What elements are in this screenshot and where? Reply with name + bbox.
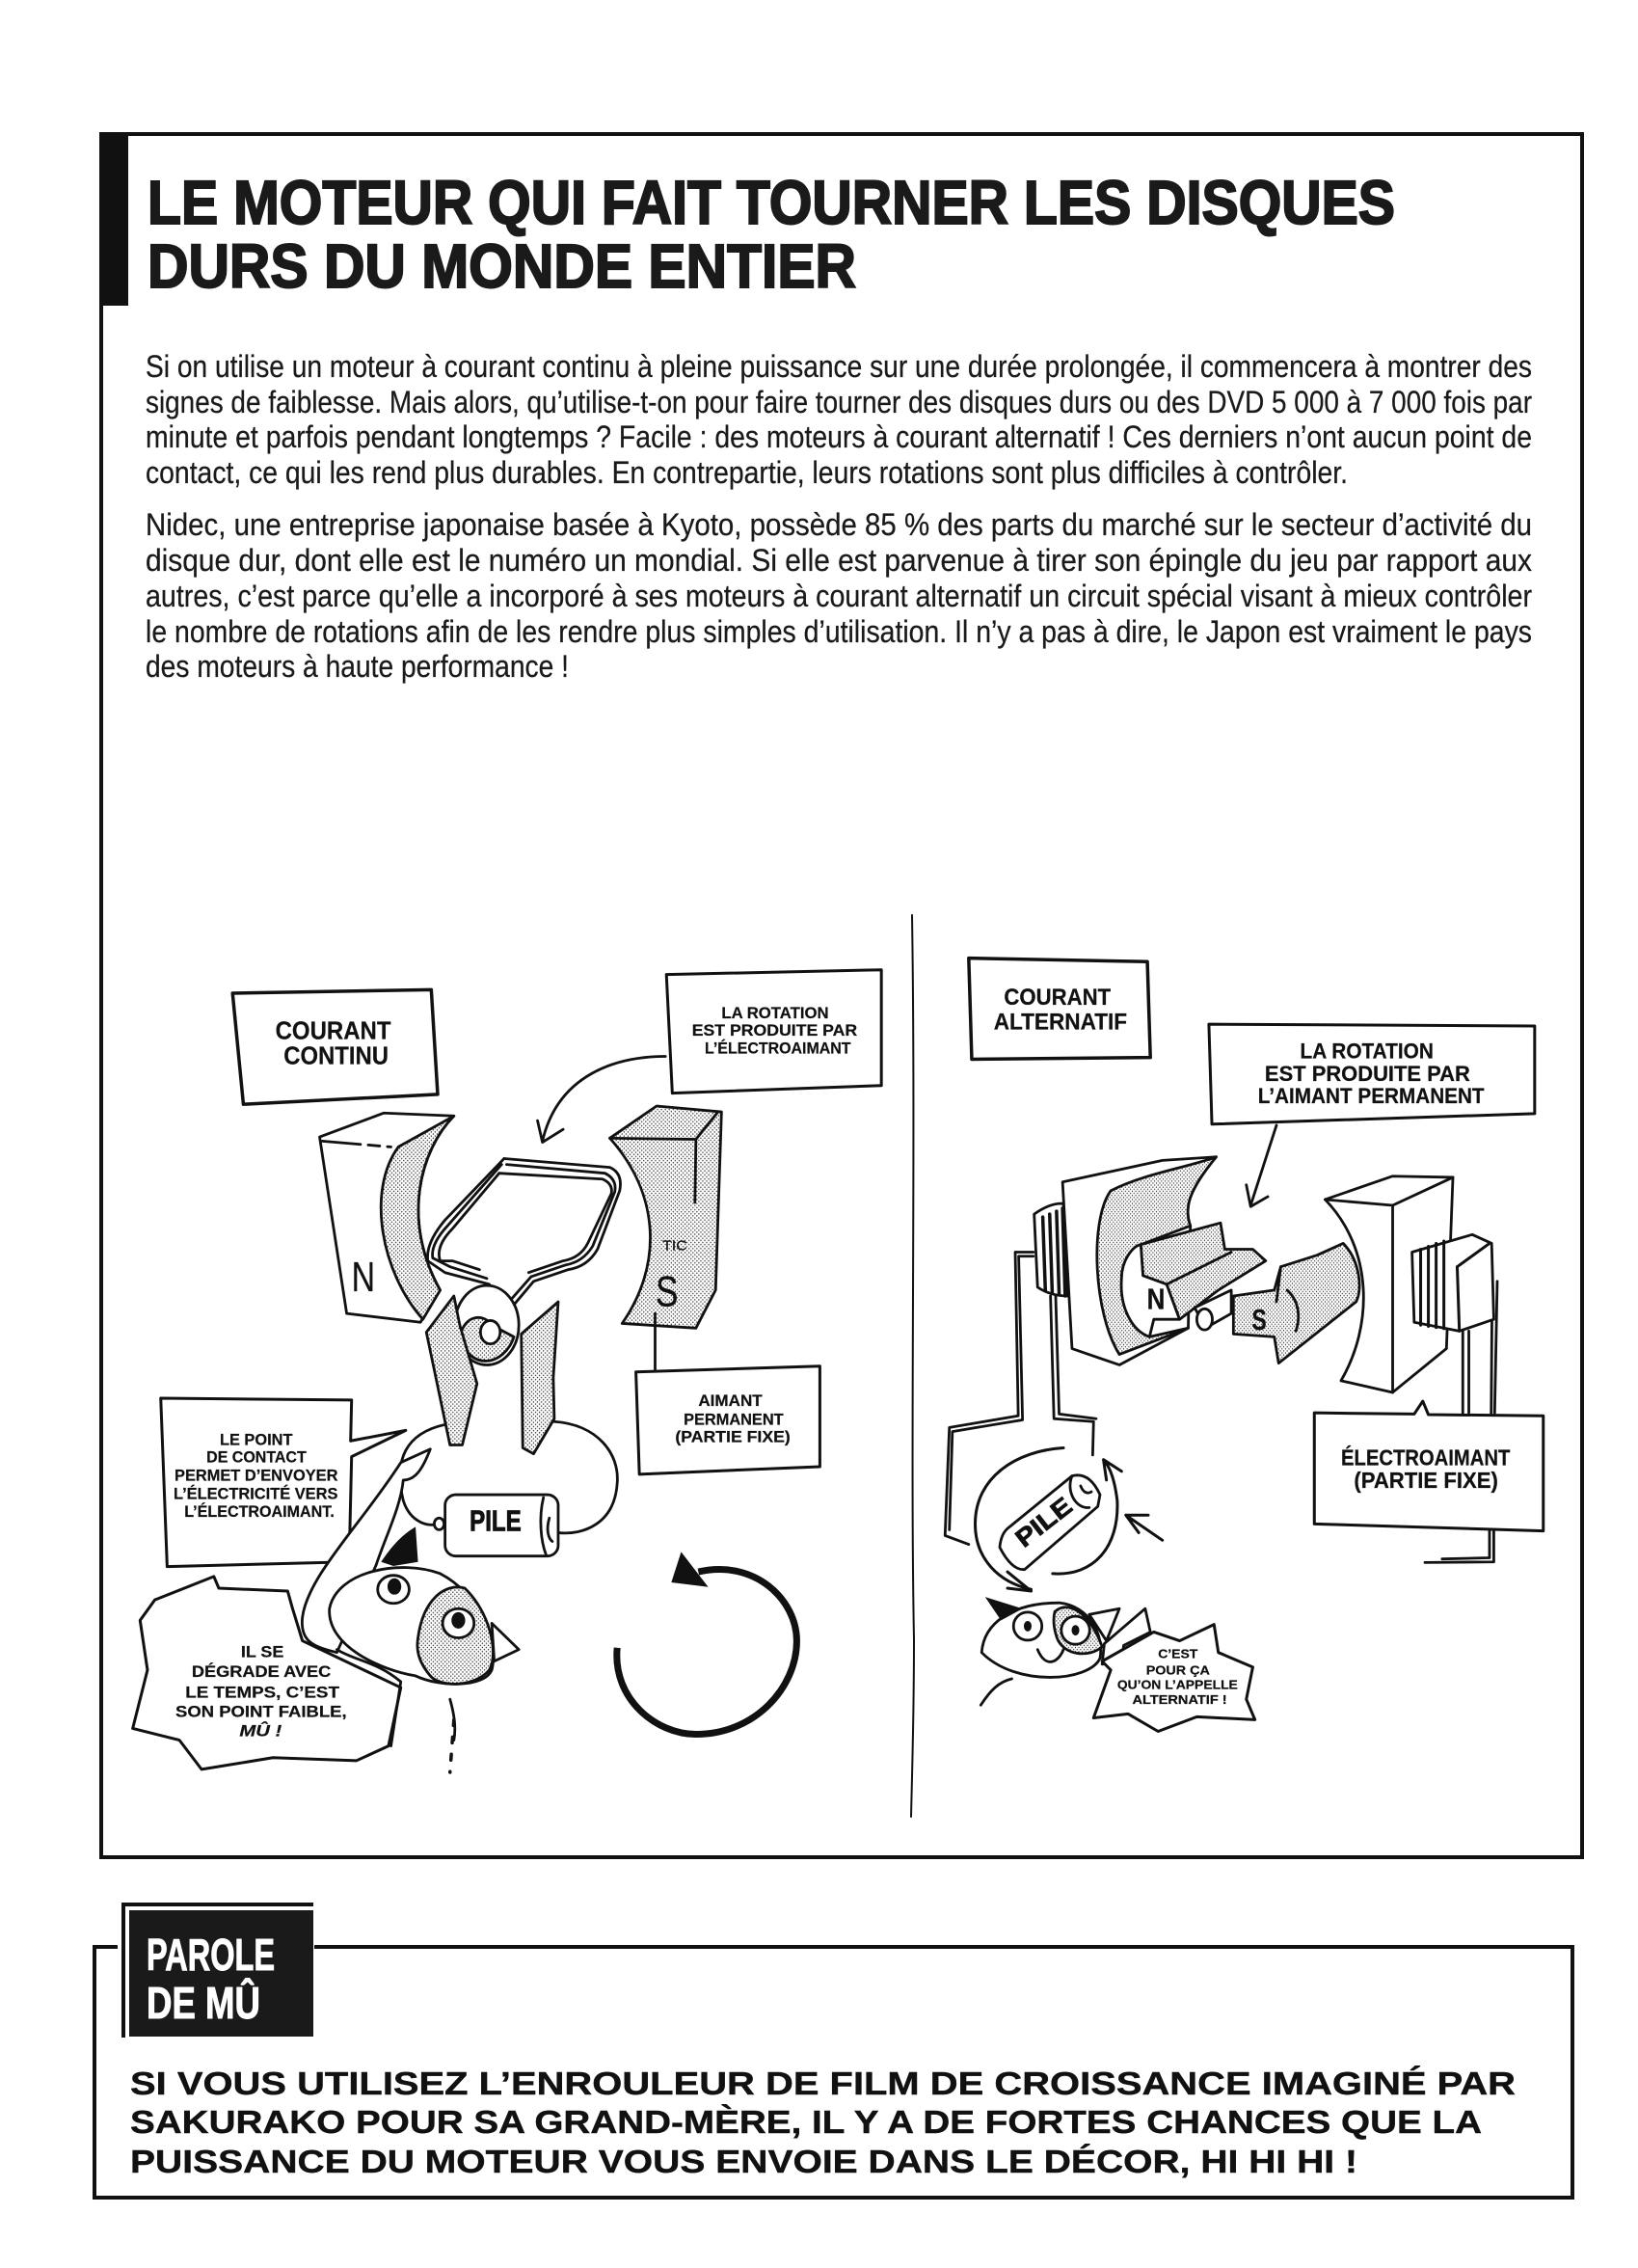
- wires: right coil: [1425, 1282, 1497, 1562]
- text block: Mû's remark: [130, 2066, 1516, 2179]
- diagram: alternating current motor: [945, 958, 1544, 1732]
- panel: parole de Mû: [94, 1898, 1572, 2198]
- speech bubble: alternatif: QU’ON L’APPELLE: [1117, 1678, 1238, 1692]
- callout: point de contact: [161, 1398, 406, 1567]
- label box: aimant permanent: AIMANT: [698, 1392, 764, 1410]
- tab: parole de Mû: PAROLE: [147, 1930, 275, 1980]
- label box: rotation by permanent magnet: EST PRODUITE PAR: [1265, 1063, 1470, 1087]
- tab: parole de Mû: [118, 1898, 314, 2040]
- label box: courant continu: COURANT: [276, 1017, 391, 1045]
- speech bubble: point faible: LE TEMPS, C’EST: [185, 1684, 340, 1702]
- speech bubble: point faible: MÛ !: [239, 1721, 282, 1741]
- speech bubble: point faible: [133, 1577, 401, 1769]
- label box: rotation by permanent magnet: LA ROTATION: [1301, 1040, 1434, 1064]
- speech bubble: alternatif: [1093, 1625, 1255, 1732]
- magnet: south pole: S: [656, 1266, 678, 1315]
- magnet: south pole: TIC: [662, 1238, 687, 1254]
- magnet: south pole: [1325, 1176, 1453, 1392]
- label box: courant continu: CONTINU: [283, 1042, 389, 1070]
- coil: right: [1412, 1234, 1493, 1331]
- text block: second paragraph: [146, 507, 1532, 684]
- label box: electroaimant: ÉLECTROAIMANT: [1341, 1445, 1511, 1471]
- text block: first paragraph: contact, ce qui les rend plus durables. En contrepartie, leurs rotations sont plus difficiles à contrôler.: [146, 455, 1348, 490]
- text block: Mû's remark: PUISSANCE DU MOTEUR VOUS ENVOIE DANS LE DÉCOR, HI HI HI !: [130, 2144, 1357, 2179]
- magnet: north pole: [1062, 1157, 1216, 1364]
- speech bubble: point faible: IL SE: [241, 1643, 283, 1661]
- rotor: north half: N: [1147, 1282, 1165, 1315]
- label box: electroaimant: (PARTIE FIXE): [1354, 1469, 1498, 1493]
- magnet: north pole: N: [352, 1253, 375, 1301]
- text block: Mû's remark: SI VOUS UTILISEZ L’ENROULEUR DE FILM DE CROISSANCE IMAGINÉ PAR: [130, 2066, 1516, 2101]
- label box: electroaimant: [1314, 1401, 1544, 1531]
- character: Mû head: [980, 1597, 1150, 1705]
- title: DURS DU MONDE ENTIER: [148, 231, 856, 301]
- callout: point de contact: L’ÉLECTROAIMANT.: [184, 1503, 335, 1521]
- magnet: south pole: [610, 1106, 721, 1328]
- divider between the two diagrams: [911, 915, 914, 1817]
- text block: Mû's remark: SAKURAKO POUR SA GRAND-MÈRE, IL Y A DE FORTES CHANCES QUE LA: [130, 2104, 1482, 2140]
- shaft: [1195, 1290, 1231, 1330]
- title: LE MOTEUR QUI FAIT TOURNER LES DISQUES: [148, 168, 1395, 237]
- speech bubble: point faible: SON POINT FAIBLE,: [175, 1703, 347, 1721]
- brush: right contact: [522, 1302, 558, 1454]
- magnet: north pole: [320, 1113, 454, 1322]
- label box: rotation by electromagnet: EST PRODUITE PAR: [692, 1022, 857, 1040]
- arrow: to rotor: [1247, 1125, 1276, 1206]
- speech bubble: alternatif: POUR ÇA: [1146, 1663, 1210, 1678]
- arrows: alternating direction: [976, 1448, 1163, 1591]
- text block: second paragraph: disque dur, dont elle est le numéro un mondial. Si elle est parvenue à tirer son épingle du jeu par rapport aux: [146, 543, 1532, 578]
- label box: courant alternatif: COURANT: [1004, 984, 1111, 1011]
- label box: aimant permanent: PERMANENT: [684, 1411, 784, 1429]
- callout: point de contact: DE CONTACT: [206, 1449, 308, 1467]
- label box: rotation by permanent magnet: L’AIMANT PERMANENT: [1258, 1085, 1485, 1109]
- wire circuit: [400, 1421, 617, 1533]
- label box: aimant permanent: (PARTIE FIXE): [675, 1428, 791, 1446]
- battery: [1000, 1475, 1100, 1570]
- label box: rotation by permanent magnet: [1209, 1024, 1535, 1124]
- text block: first paragraph: [146, 349, 1532, 490]
- callout: point de contact: L’ÉLECTRICITÉ VERS: [174, 1485, 337, 1503]
- battery: PILE: [1009, 1491, 1078, 1553]
- tab: parole de Mû: DE MÛ: [147, 1978, 260, 2028]
- speech bubble: alternatif: ALTERNATIF !: [1132, 1693, 1227, 1707]
- label box: rotation by electromagnet: L’ÉLECTROAIMANT: [705, 1040, 851, 1058]
- speech bubble: point faible: DÉGRADE AVEC: [192, 1663, 331, 1681]
- coil: left: [1034, 1203, 1067, 1296]
- label box: courant alternatif: [969, 958, 1150, 1059]
- rotation arrow: [617, 1552, 796, 1735]
- arrow: to coil: [538, 1056, 665, 1143]
- callout: point de contact: PERMET D’ENVOYER: [175, 1467, 338, 1485]
- diagram: direct current motor: [133, 970, 881, 1772]
- rotor: south half: [1233, 1243, 1359, 1364]
- character: Mû pointing: [302, 1449, 519, 1772]
- brush: left contact: [426, 1296, 477, 1445]
- heading accent bar: [100, 133, 128, 306]
- label box: aimant permanent: [636, 1313, 819, 1474]
- label box: rotation by electromagnet: [666, 970, 881, 1094]
- battery: [434, 1495, 558, 1556]
- coil: electromagnet wire loop: [427, 1159, 620, 1305]
- text block: second paragraph: des moteurs à haute performance !: [146, 649, 569, 684]
- title: [148, 168, 1395, 301]
- label box: courant alternatif: ALTERNATIF: [994, 1009, 1127, 1035]
- label box: rotation by electromagnet: LA ROTATION: [721, 1005, 829, 1022]
- rotor: south half: S: [1252, 1304, 1267, 1336]
- speech bubble: alternatif: C’EST: [1158, 1647, 1198, 1661]
- commutator: [455, 1285, 519, 1364]
- text block: second paragraph: Nidec, une entreprise japonaise basée à Kyoto, possède 85 % des parts du marché sur le secteur d’activité du: [146, 507, 1532, 542]
- panel: main article frame: [100, 133, 1582, 1857]
- battery: PILE: [470, 1505, 522, 1537]
- rotor: north half: [1121, 1223, 1266, 1336]
- label box: courant continu: [232, 989, 438, 1104]
- wires: left coil to battery: [945, 1253, 1096, 1545]
- callout: point de contact: LE POINT: [220, 1431, 293, 1449]
